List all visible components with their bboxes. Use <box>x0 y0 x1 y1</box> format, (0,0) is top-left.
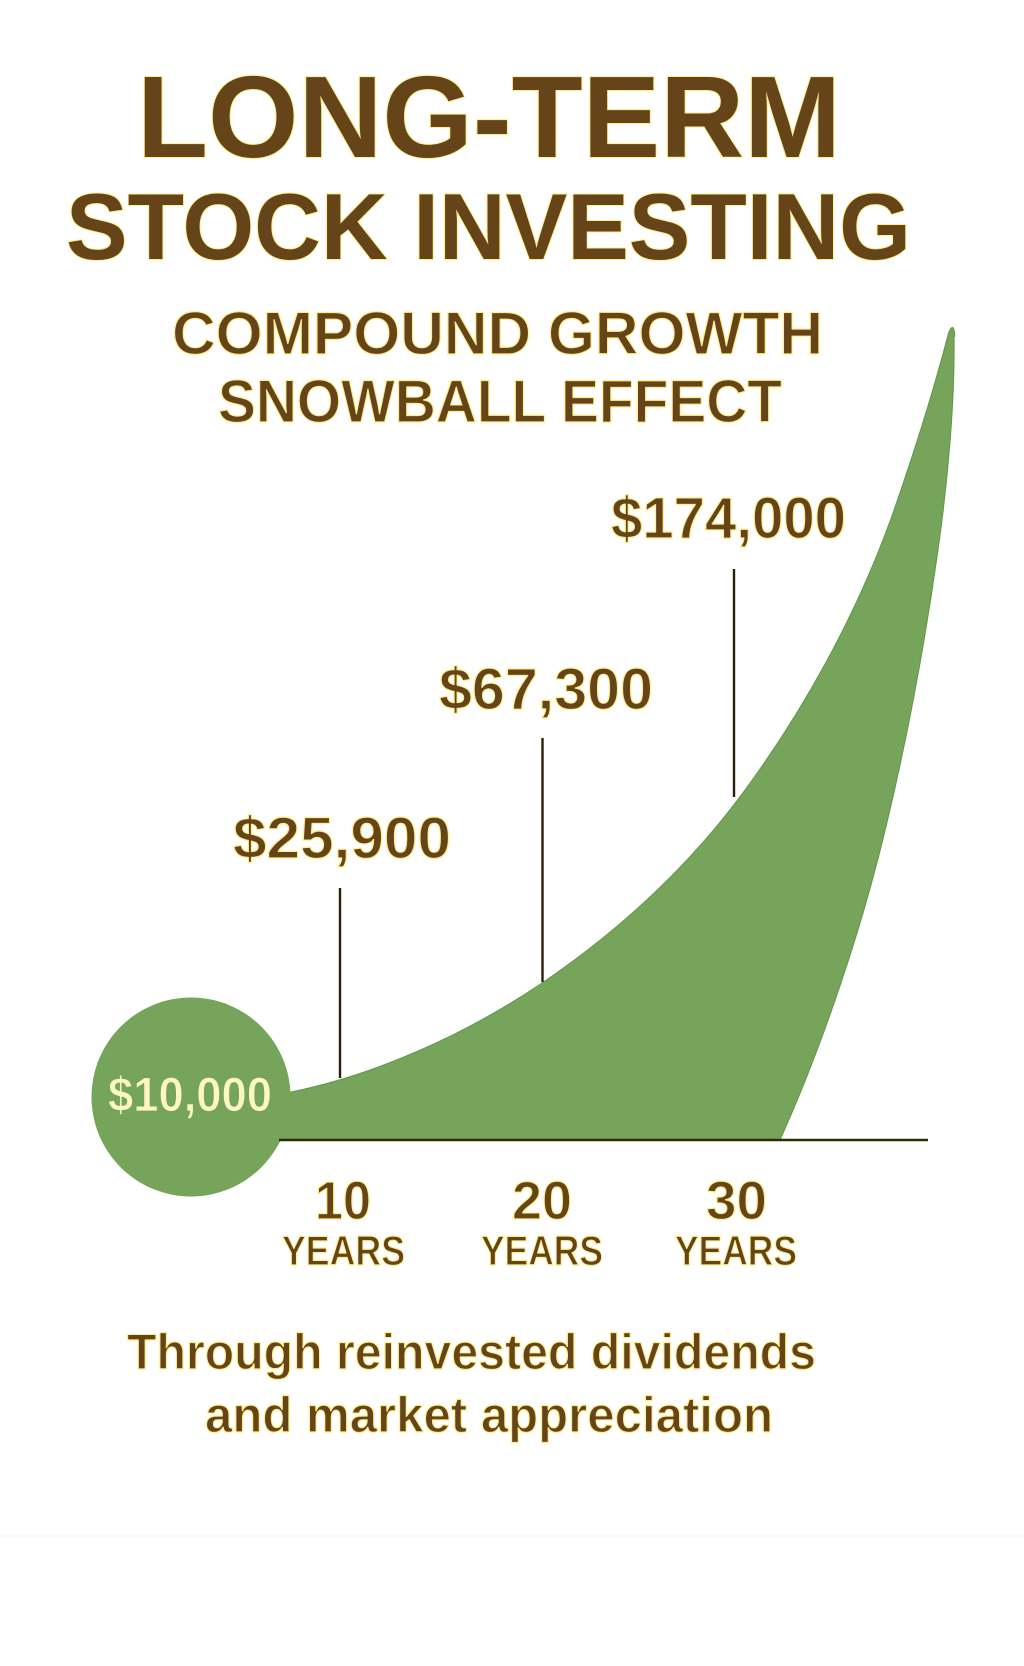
axis label: 10 years: YEARS <box>282 1227 405 1274</box>
caption: and market appreciation <box>205 1387 773 1443</box>
growth curve area <box>281 328 955 1140</box>
baseline axis <box>279 1139 928 1141</box>
subtitle: COMPOUND GROWTH <box>172 300 823 367</box>
title: LONG-TERM <box>137 52 841 182</box>
leader line: 30 years <box>733 569 735 797</box>
value: 30 years: $174,000 <box>611 486 846 551</box>
subtitle <box>172 300 823 435</box>
title: STOCK INVESTING <box>66 174 911 279</box>
leader line: 20 years <box>541 738 544 982</box>
axis label: 20 years <box>481 1171 603 1274</box>
axis label: 10 years: 10 <box>315 1171 371 1231</box>
subtitle: SNOWBALL EFFECT <box>218 368 782 435</box>
axis label: 30 years: YEARS <box>675 1227 797 1274</box>
value: starting amount: $10,000 <box>108 1069 272 1122</box>
leader line: 10 years <box>339 888 341 1078</box>
axis label: 20 years: YEARS <box>481 1227 603 1274</box>
axis label: 10 years <box>282 1171 405 1274</box>
value: 20 years: $67,300 <box>439 657 653 722</box>
caption: Through reinvested dividends <box>127 1324 816 1380</box>
value: 10 years: $25,900 <box>233 806 451 871</box>
axis label: 20 years: 20 <box>512 1171 572 1231</box>
title <box>66 52 911 279</box>
axis label: 30 years <box>675 1171 797 1274</box>
caption <box>127 1324 816 1443</box>
starting circle <box>92 998 290 1196</box>
axis label: 30 years: 30 <box>706 1171 767 1231</box>
